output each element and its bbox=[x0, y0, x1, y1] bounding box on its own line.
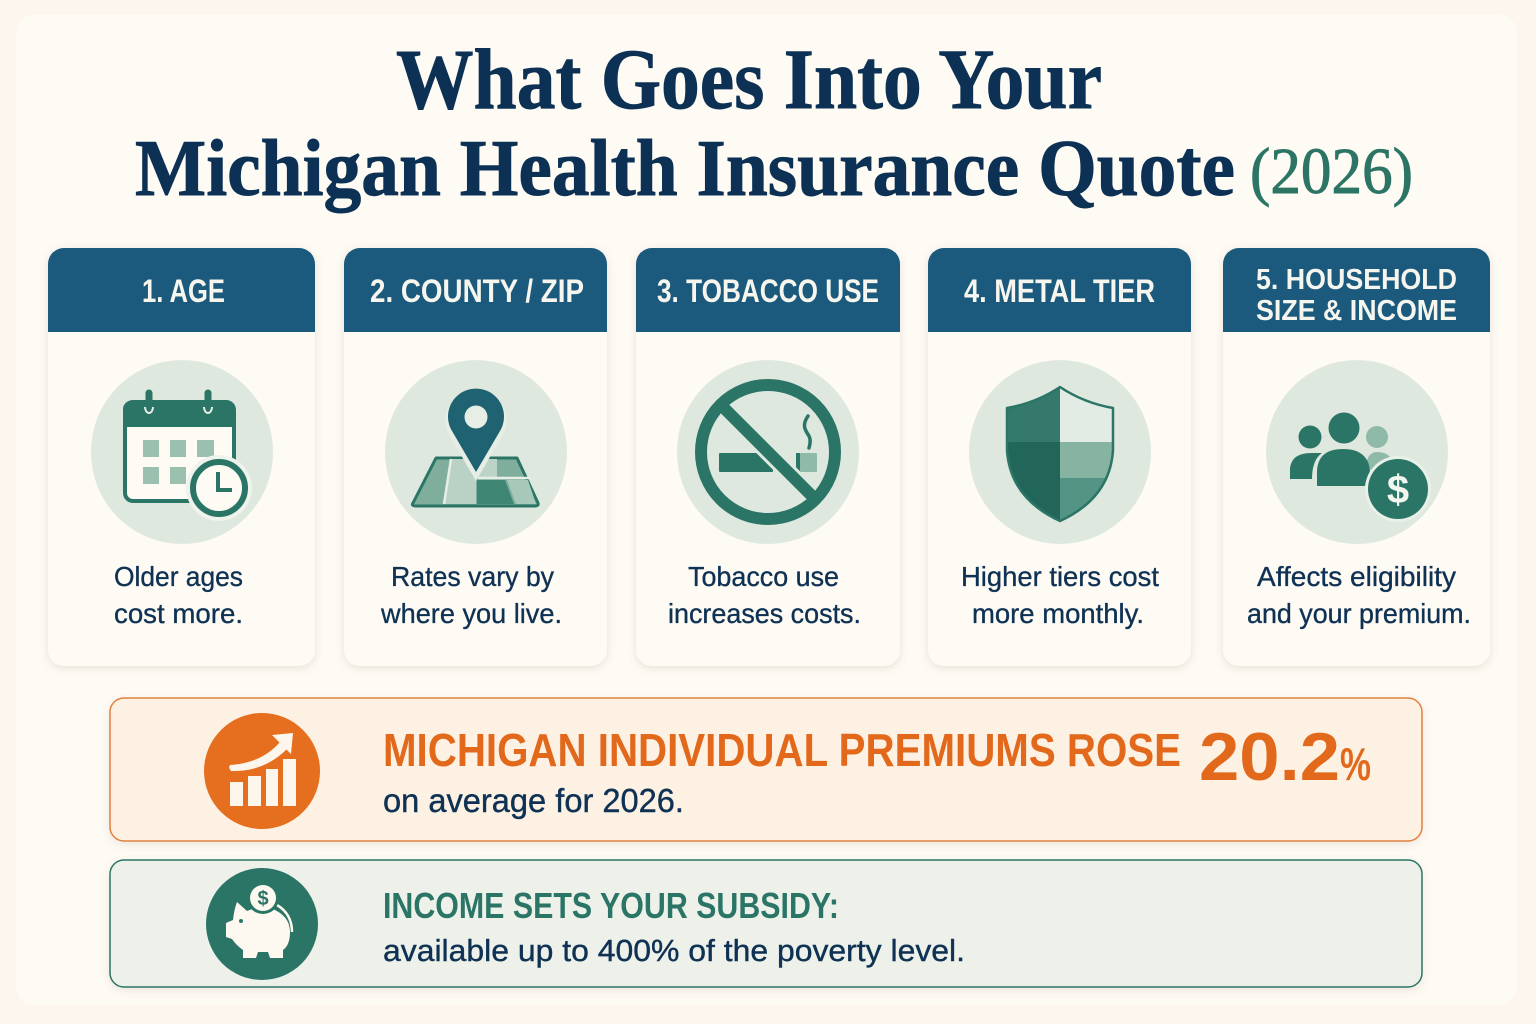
icon: map pin bbox=[385, 360, 567, 544]
header: county bbox=[344, 248, 607, 332]
text: tobacco bbox=[668, 561, 861, 629]
title: (2026) bbox=[1250, 135, 1413, 208]
text: age: cost more. bbox=[114, 598, 243, 629]
icon: family and dollar: $ bbox=[1387, 468, 1409, 512]
text: county bbox=[380, 561, 562, 629]
header: metal tier bbox=[928, 248, 1191, 332]
icon: calendar and clock bbox=[91, 360, 273, 544]
callout: premiums rose bbox=[110, 698, 1422, 841]
icon: shield bbox=[969, 360, 1151, 544]
text: household bbox=[1247, 561, 1471, 629]
text: tobacco: Tobacco use bbox=[688, 561, 839, 592]
statistic: 20.2%: 20.2 bbox=[1199, 719, 1340, 795]
icon: piggy bank bbox=[206, 868, 318, 980]
text: metal tier: Higher tiers cost bbox=[961, 561, 1159, 592]
text: metal tier bbox=[961, 561, 1159, 629]
header: tobacco bbox=[636, 248, 900, 332]
text: age bbox=[114, 561, 243, 629]
title: What Goes Into Your bbox=[396, 31, 1102, 127]
text: tobacco: increases costs. bbox=[668, 598, 861, 629]
text: metal tier: more monthly. bbox=[972, 598, 1144, 629]
statistic: 20.2%: % bbox=[1340, 738, 1371, 790]
panel: tobacco bbox=[636, 248, 900, 666]
callout heading: INCOME SETS YOUR SUBSIDY: bbox=[383, 885, 839, 926]
panel: household bbox=[1223, 248, 1490, 666]
panel: metal tier bbox=[928, 248, 1191, 666]
panel: age bbox=[48, 248, 315, 666]
icon: rising chart bbox=[204, 713, 320, 829]
header: tobacco: 3. TOBACCO USE bbox=[657, 273, 879, 309]
header: household: SIZE & INCOME bbox=[1256, 295, 1457, 327]
title bbox=[135, 31, 1413, 213]
header: county: 2. COUNTY / ZIP bbox=[370, 273, 584, 309]
callout text: on average for 2026. bbox=[383, 782, 684, 819]
title: Michigan Health Insurance Quote bbox=[135, 125, 1235, 213]
panel: county bbox=[344, 248, 607, 666]
callout: subsidy bbox=[110, 860, 1422, 987]
header: age: 1. AGE bbox=[142, 273, 225, 309]
header: age bbox=[48, 248, 315, 332]
text: county: where you live. bbox=[380, 598, 562, 629]
header: household: 5. HOUSEHOLD bbox=[1256, 264, 1457, 296]
icon: piggy bank: $ bbox=[257, 888, 269, 910]
text: age: Older ages bbox=[114, 561, 243, 592]
text: household: and your premium. bbox=[1247, 598, 1471, 629]
icon: no smoking bbox=[677, 360, 859, 544]
text: county: Rates vary by bbox=[391, 561, 554, 592]
text: household: Affects eligibility bbox=[1257, 561, 1456, 592]
callout text: available up to 400% of the poverty level. bbox=[383, 933, 965, 968]
icon: family and dollar bbox=[1266, 360, 1448, 544]
header: household bbox=[1223, 248, 1490, 332]
header: metal tier: 4. METAL TIER bbox=[964, 273, 1155, 309]
callout heading: MICHIGAN INDIVIDUAL PREMIUMS ROSE bbox=[383, 724, 1181, 776]
